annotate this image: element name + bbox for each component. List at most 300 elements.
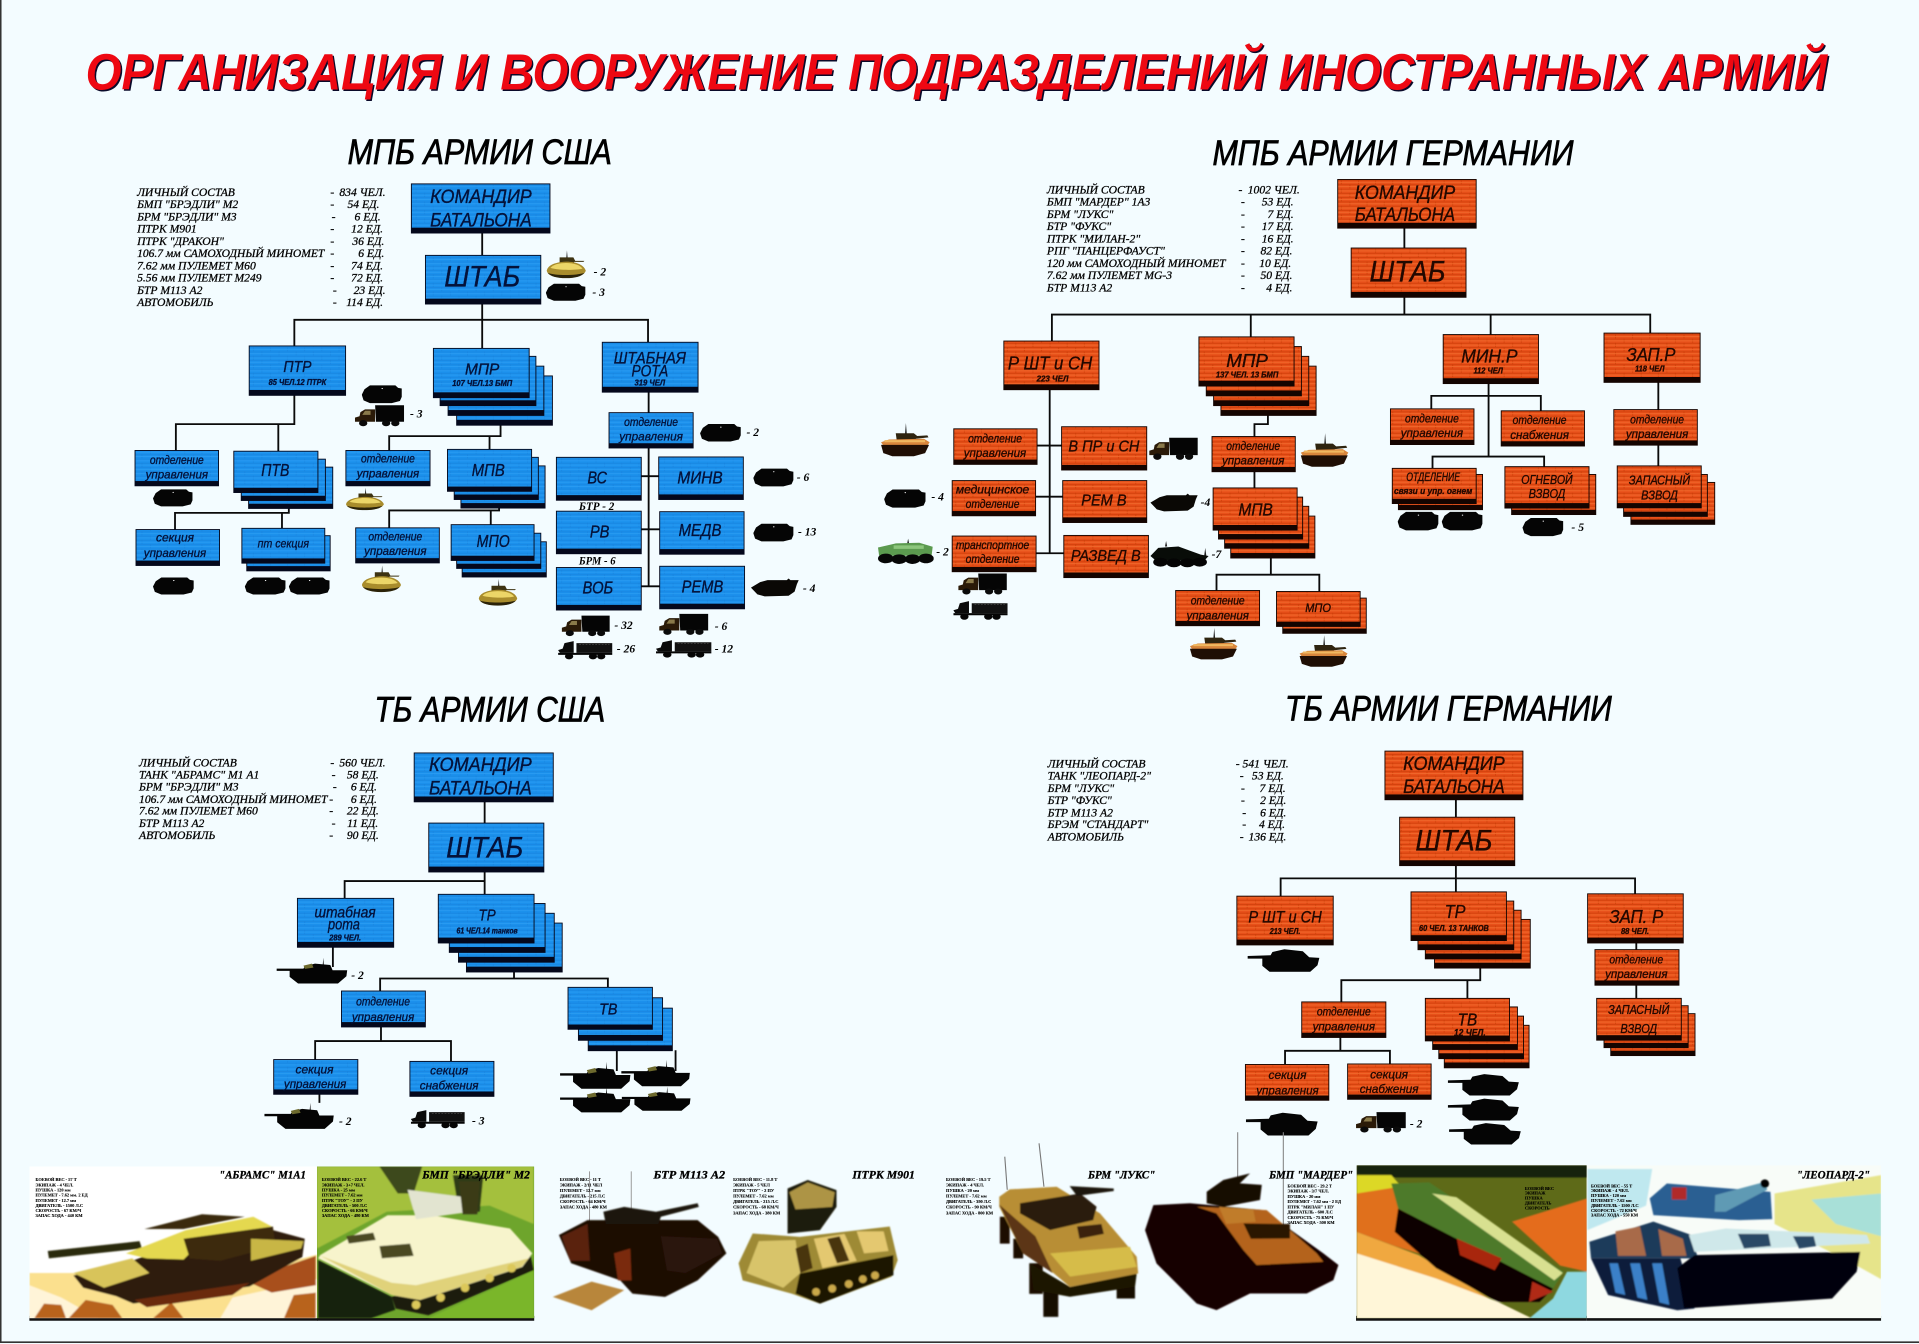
table: вооружение МПБ США: - [330, 198, 334, 211]
icon: автомобиль секции снабжения: - 3 [472, 1114, 485, 1127]
spec list: Лукс: ЭКИПАЖ - 4 ЧЕЛ. [946, 1183, 984, 1188]
label: Брэдли title: БМП "БРЭДЛИ" М2 [421, 1169, 530, 1182]
spec list: М901: ПУЛЕМЕТ - 7.62 мм [733, 1194, 774, 1199]
box: отделение управления МПР [1212, 437, 1295, 471]
box: отделение управления МПВ: отделение [1191, 594, 1245, 608]
box stack: МПВ: МПВ [1239, 499, 1273, 519]
table: вооружение МПБ Германии: 120 мм САМОХОДНЫЙ МИНОМЕТ [1047, 255, 1227, 270]
box: отделение управления штабной роты: отделение [624, 415, 678, 429]
box: ЗАП. Р: ЗАП. Р [1609, 906, 1664, 927]
spec list: Брэдли [322, 1177, 370, 1218]
box stack: ТВ: ТВ [1458, 1010, 1477, 1030]
table: вооружение ТБ Германии: - [1240, 830, 1244, 843]
box: отделение управления: управления [963, 446, 1027, 460]
table: вооружение МПБ США: 114 ЕД. [346, 296, 383, 309]
photo panel: Абрамс М1А1 [29, 1167, 318, 1321]
spec list: Абрамс: ЭКИПАЖ - 4 ЧЕЛ. [35, 1182, 73, 1187]
table: вооружение ТБ Германии: 2 ЕД. [1260, 794, 1286, 807]
box: медицинское отделение: отделение [966, 498, 1020, 511]
icons: автомобили ВОБ: - 32 [614, 619, 633, 632]
spec list: Леопард-2: СКОРОСТЬ - 72 КМ/Ч [1591, 1208, 1637, 1213]
box: ВС [557, 458, 641, 500]
icon: танк секции управления [264, 1103, 352, 1129]
icon: БРМ -7 [1150, 541, 1222, 567]
table: вооружение ТБ Германии: - [1242, 818, 1246, 831]
icon: автомобиль -2: - 2 [1410, 1117, 1423, 1130]
table: вооружение ТБ США: 6 ЕД. [351, 793, 377, 806]
spec list: Мардер: ПУШКА - 20 мм [1287, 1194, 1320, 1199]
spec list: Брэдли: БОЕВОЙ ВЕС - 22.6 Т [322, 1177, 366, 1182]
table: вооружение МПБ Германии: 82 ЕД. [1260, 245, 1292, 258]
photo panel: Мардер на склоне [1356, 1165, 1587, 1321]
box: отделение управления [342, 991, 425, 1026]
box: отделение снабжения: снабжения [1510, 428, 1569, 442]
box: Р ШТ и СН: 223 ЧЕЛ [1036, 374, 1069, 383]
icon: БРЭМ -4 [1150, 494, 1210, 511]
box: командир батальона: КОМАНДИР [429, 755, 532, 776]
box: отделение управления МПВ: управления [363, 544, 427, 558]
label: БРМ - 6: БРМ - 6 [578, 554, 616, 567]
box: транспортное отделение: отделение [966, 553, 1020, 566]
box: ЗАП. Р [1588, 894, 1683, 943]
table: вооружение МПБ Германии: - [1241, 208, 1245, 221]
box: МИН.Р: МИН.Р [1461, 345, 1518, 366]
spec list: Абрамс [35, 1177, 88, 1218]
box: Р ШТ и СН [1004, 342, 1099, 389]
spec list: Мардер: СКОРОСТЬ - 75 КМ/Ч [1287, 1215, 1334, 1220]
box: секция снабжения [1348, 1064, 1431, 1099]
box: отделение управления миномётной роты [1391, 409, 1474, 444]
box: РАЗВЕД В [1064, 536, 1148, 577]
box stack: МПО [452, 525, 546, 577]
icons: штаб vehicles: - 2 [594, 265, 606, 278]
table: вооружение ТБ США: - [332, 768, 336, 781]
table: вооружение ТБ США: 58 ЕД. [347, 768, 379, 781]
spec list: Абрамс: ЗАПАС ХОДА - 440 КМ [35, 1213, 83, 1218]
spec list: Мардер (фото): БОЕВОЙ ВЕС [1525, 1186, 1554, 1191]
box: секция управления: секция [1269, 1068, 1307, 1082]
table: вооружение МПБ США: - [330, 247, 334, 260]
box stack: ТР: 61 ЧЕЛ.14 танков [456, 926, 518, 935]
spec list: Абрамс: ДВИГАТЕЛЬ - 1500 Л.С [35, 1203, 83, 1208]
table: вооружение МПБ Германии: - [1241, 220, 1245, 233]
box: командир батальона: КОМАНДИР [1355, 182, 1455, 204]
icon: БТР -2: - 2 [747, 426, 759, 439]
table: вооружение МПБ США: 106.7 мм САМОХОДНЫЙ МИНОМЕТ [137, 245, 326, 260]
table: вооружение ТБ США: 6 ЕД. [351, 781, 377, 794]
table: вооружение МПБ США: ПТРК М901 [136, 223, 197, 236]
box: командир батальона [1338, 180, 1476, 228]
box: Р ШТ и СН: Р ШТ и СН [1008, 353, 1093, 374]
panel: ТБ армии Германии [1047, 689, 1695, 1144]
table: вооружение ТБ США: - [329, 829, 333, 842]
icons: миномёты [1398, 512, 1482, 530]
spec list: Мардер: ПТРК "МИЛАН" 1 ПУ [1287, 1204, 1335, 1209]
spec list: Лукс [946, 1177, 994, 1215]
table: вооружение МПБ США: 72 ЕД. [351, 272, 383, 285]
icon: БТР Фукс -2: - 2 [936, 546, 949, 559]
photo: БМП Мардер [1145, 1132, 1353, 1310]
table: вооружение ТБ Германии: - [1242, 806, 1246, 819]
box: штаб [1352, 248, 1466, 297]
table: вооружение МПБ США: - [333, 284, 337, 297]
spec list: Брэдли: ПУЛЕМЕТ - 7.62 мм [322, 1193, 363, 1198]
box: штабная рота: 289 ЧЕЛ. [328, 934, 361, 943]
spec list: М113: БОЕВОЙ ВЕС - 11 Т [560, 1177, 601, 1182]
icon: танк -2 [277, 958, 364, 983]
box: отделение управления [954, 429, 1037, 464]
box: ВС: ВС [587, 467, 608, 487]
table: вооружение МПБ Германии: ЛИЧНЫЙ СОСТАВ [1046, 181, 1145, 196]
box: командир батальона [412, 184, 550, 233]
spec list: М901 [733, 1177, 781, 1215]
table: вооружение МПБ США: 6 ЕД. [355, 210, 381, 223]
box stack: МПР: 107 ЧЕЛ.13 БМП [452, 379, 512, 388]
table: вооружение МПБ США: 834 ЧЕЛ. [339, 186, 386, 199]
box: отделение управления МПР: отделение [1226, 439, 1280, 453]
box: В ПР и СН [1062, 427, 1146, 470]
box: отделение управления МПР: отделение [361, 452, 415, 466]
photo: БТР М113 А2 [553, 1169, 726, 1310]
box: ПТР [250, 346, 345, 395]
box: отделение управления запасной роты [1614, 410, 1697, 445]
table: вооружение МПБ Германии: 7 ЕД. [1268, 208, 1294, 221]
spec list: Леопард-2 [1591, 1183, 1639, 1218]
table: вооружение ТБ Германии: - 541 ЧЕЛ. [1236, 757, 1289, 770]
icon: танк [1248, 949, 1319, 972]
box: отделение управления: управления [1312, 1020, 1375, 1034]
box: отделение управления запасной роты: управления [1604, 967, 1668, 981]
box: РЕМ В [1063, 481, 1146, 522]
icons: три танка [1448, 1074, 1521, 1144]
box: ЗАП.Р: ЗАП.Р [1626, 344, 1676, 365]
table: вооружение ТБ Германии: ТАНК "ЛЕОПАРД-2" [1048, 770, 1151, 783]
box stack: ПТВ [234, 452, 332, 508]
box stack: ТР [1411, 892, 1530, 968]
connector lines [315, 801, 676, 1103]
box: отделение управления штабной роты [609, 413, 693, 448]
icon: миномёт -5: - 5 [1571, 521, 1584, 534]
table: вооружение ТБ США: АВТОМОБИЛЬ [138, 829, 216, 842]
box: отделение управления МПР: управления [356, 466, 420, 480]
icons: БТР пт секции [245, 578, 330, 595]
icons: БТР и автомобиль: - 3 [410, 407, 423, 420]
spec list: Абрамс: БОЕВОЙ ВЕС - 57 Т [35, 1177, 77, 1182]
box: штабная рота: рота [327, 917, 360, 934]
box stack: огневой взвод: ОГНЕВОЙ [1521, 471, 1573, 487]
box stack: запасный взвод: ЗАПАСНЫЙ [1608, 1001, 1670, 1017]
spec list: Мардер: ПУЛЕМЕТ - 7.62 мм - 2 ЕД [1287, 1199, 1341, 1204]
spec list: М113: СКОРОСТЬ - 64 КМ/Ч [560, 1199, 606, 1204]
icons: автомобили РЕМВ [656, 614, 733, 658]
spec list: Брэдли: ЗАПАС ХОДА - 480 КМ [322, 1213, 370, 1218]
spec list: Лукс: ПУЛЕМЕТ - 7.62 мм [946, 1194, 987, 1199]
box stack: МПВ [448, 450, 545, 508]
box: МЕДВ: МЕДВ [679, 520, 721, 540]
table: вооружение ТБ США: - [329, 805, 333, 818]
box stack: ТВ [1426, 999, 1529, 1067]
table: вооружение МПБ Германии: 50 ЕД. [1260, 269, 1292, 282]
icon: БРЭМ: - 4 [803, 582, 816, 595]
box stack: МПР [1199, 337, 1316, 415]
table: вооружение МПБ Германии: - [1241, 257, 1245, 270]
box stack: МПР: МПР [465, 362, 500, 379]
box: командир батальона [415, 753, 553, 801]
panel: МПБ армии США [135, 132, 817, 659]
spec list: Лукс: ЗАПАС ХОДА - 800 КМ [946, 1210, 994, 1215]
spec list: М901: ЭКИПАЖ - 5 ЧЕЛ [733, 1183, 771, 1188]
label: Леопард-2 title: "ЛЕОПАРД-2" [1797, 1169, 1870, 1182]
box: секция снабжения: секция [430, 1064, 469, 1078]
spec list: Леопард-2: ЗАПАС ХОДА - 550 КМ [1591, 1213, 1639, 1218]
table: вооружение ТБ США: 22 ЕД. [347, 805, 379, 818]
icon: БТР МИНВ [753, 469, 809, 486]
spec list: Мардер: ДВИГАТЕЛЬ - 600 Л.С [1287, 1210, 1333, 1215]
box: отделение управления миномётной роты: управления [1400, 426, 1464, 440]
box: МЕДВ [660, 512, 744, 554]
icon: БТР под отделением [153, 489, 192, 506]
box stack: ТР: ТР [479, 907, 496, 924]
label: БТР - 2: БТР - 2 [578, 500, 615, 513]
label: ПТРК М901 title: ПТРК М901 [851, 1169, 915, 1182]
spec list: М901: ДВИГАТЕЛЬ - 215 Л.С [733, 1199, 778, 1204]
box: ЗАП. Р: 88 ЧЕЛ. [1621, 927, 1649, 936]
box: МИН.Р: 112 ЧЕЛ [1474, 366, 1503, 375]
table: вооружение ТБ США: ТАНК "АБРАМС" М1 А1 [139, 768, 259, 781]
table: вооружение МПБ США: - [330, 223, 334, 236]
box: транспортное отделение: транспортное [956, 539, 1030, 552]
table: вооружение МПБ США: БМП "БРЭДЛИ" М2 [136, 198, 238, 211]
box: отделение управления запасной роты: отделение [1630, 413, 1684, 427]
panel: МПБ армии Германии [878, 133, 1714, 667]
icon: танк секции управления: - 2 [339, 1115, 352, 1128]
table: вооружение ТБ Германии: 53 ЕД. [1252, 770, 1284, 783]
table: вооружение ТБ Германии: ЛИЧНЫЙ СОСТАВ [1047, 755, 1145, 770]
table: вооружение МПБ США: БРМ "БРЭДЛИ" М3 [136, 210, 237, 223]
box: РЕМВ [660, 567, 744, 608]
spec list: Мардер: ЭКИПАЖ - 3/7 ЧЕЛ. [1287, 1189, 1329, 1194]
box: отделение управления МПВ [1176, 591, 1259, 625]
icon: танк секции управления [1246, 1113, 1318, 1136]
box stack: запасный взвод [1597, 999, 1695, 1055]
spec list: Лукс: БОЕВОЙ ВЕС - 19.5 Т [946, 1177, 991, 1182]
icons: автомобили ВОБ: - 26 [617, 642, 635, 655]
box: медицинское отделение [953, 481, 1035, 515]
label: Абрамс title: "АБРАМС" М1А1 [219, 1169, 306, 1182]
box: РАЗВЕД В: РАЗВЕД В [1071, 548, 1141, 565]
box: секция снабжения: секция [1370, 1067, 1409, 1081]
table: вооружение МПБ Германии: 1002 ЧЕЛ. [1248, 183, 1300, 196]
box: командир батальона [1385, 752, 1522, 799]
box stack: ТВ: 12 ЧЕЛ. [1454, 1028, 1486, 1039]
box stack: пт секция [242, 529, 330, 570]
table: вооружение МПБ Германии: 4 ЕД. [1266, 281, 1292, 294]
box: отделение управления: отделение [356, 995, 410, 1009]
spec list: М113: ПУЛЕМЕТ - 12.7 мм [560, 1188, 601, 1193]
box: В ПР и СН: В ПР и СН [1068, 439, 1140, 456]
icons: четыре танка [560, 1060, 690, 1112]
spec list: Абрамс: ПУЛЕМЕТ - 12.7 мм [35, 1198, 76, 1203]
box: штаб: ШТАБ [444, 260, 520, 293]
table: вооружение МПБ Германии: - [1239, 183, 1243, 196]
icons: автомобили транспортного отделения [953, 574, 1008, 620]
icon: БМП МПО [479, 579, 517, 606]
icons: БТР и автомобиль [355, 385, 423, 426]
box: секция управления: управления [143, 546, 207, 560]
table: вооружение ТБ США: - [329, 793, 333, 806]
box stack: запасный взвод: ВЗВОД [1620, 1021, 1657, 1036]
box: штабная рота: 319 ЧЕЛ [635, 379, 666, 388]
icon: БТР -2 [700, 424, 759, 442]
table: вооружение ТБ Германии: БТР "ФУКС" [1047, 794, 1112, 807]
box: секция управления: управления [283, 1077, 347, 1091]
table: вооружение ТБ Германии: БРМ "ЛУКС" [1047, 782, 1114, 795]
spec list: Лукс: ПУШКА - 20 мм [946, 1188, 979, 1193]
box stack: ПТВ: ПТВ [261, 460, 289, 480]
box stack: МПВ: МПВ [472, 460, 505, 480]
table: вооружение МПБ США: 5.56 мм ПУЛЕМЕТ М249 [137, 272, 262, 285]
spec list: Леопард-2: БОЕВОЙ ВЕС - 55 Т [1591, 1183, 1632, 1188]
box: отделение управления запасной роты: управления [1625, 427, 1689, 441]
connector lines [175, 233, 660, 586]
connector lines [1281, 799, 1636, 1065]
table: вооружение МПБ США: - [330, 272, 334, 285]
icon: БМП [346, 488, 384, 510]
box: отделение управления ПТР: отделение [150, 453, 204, 467]
box: Р ШТ и СН: 213 ЧЕЛ. [1269, 927, 1300, 936]
table: вооружение ТБ США: 106.7 мм САМОХОДНЫЙ МИНОМЕТ [139, 791, 329, 806]
table: вооружение МПБ Германии: - [1241, 269, 1245, 282]
box: штабная рота [603, 343, 698, 392]
box: отделение снабжения [1502, 411, 1584, 446]
icons: штаб vehicles [546, 250, 606, 301]
table: вооружение МПБ США: - [330, 259, 334, 272]
box stack: запасный взвод [1618, 466, 1714, 524]
spec list: Брэдли: ЭКИПАЖ - 3+7 ЧЕЛ. [322, 1182, 364, 1187]
box: секция управления [1246, 1065, 1328, 1100]
table: вооружение ТБ США: БРМ "БРЭДЛИ" М3 [138, 781, 239, 794]
box: РЕМВ: РЕМВ [682, 576, 723, 596]
spec list: Брэдли: СКОРОСТЬ - 66 КМ/Ч [322, 1208, 368, 1213]
spec list: Мардер (фото): СКОРОСТЬ [1525, 1205, 1550, 1210]
icon: автомобиль [1149, 438, 1198, 460]
box: штаб [1400, 818, 1514, 865]
icon: автомобиль -2 [1356, 1112, 1423, 1133]
icon: БТР МЕДВ [753, 524, 817, 541]
box: медицинское отделение: медицинское [956, 483, 1030, 496]
table: вооружение ТБ Германии [1047, 755, 1289, 843]
box: отделение управления: отделение [1317, 1004, 1371, 1018]
table: вооружение МПБ США: 7.62 мм ПУЛЕМЕТ М60 [137, 259, 256, 272]
icon: БРЭМ [751, 578, 816, 596]
box stack: отделение связи и управления огнем [1393, 469, 1482, 509]
spec list: М113: ЗАПАС ХОДА - 480 КМ [560, 1205, 608, 1210]
heading: МПБ армии США: МПБ АРМИИ США [348, 132, 612, 172]
box: отделение управления: отделение [968, 431, 1022, 445]
box stack: отделение связи и управления огнем: ОТДЕЛЕНИЕ [1406, 471, 1460, 484]
photo panel: БМП Брэдли М2 [317, 1167, 534, 1321]
icon: автомобиль секции снабжения [411, 1110, 485, 1128]
table: вооружение ТБ США: 7.62 мм ПУЛЕМЕТ М60 [139, 805, 258, 818]
box: ВОБ: ВОБ [583, 578, 613, 598]
spec list: М901: ПТРК "ТОУ" - 2 ПУ [733, 1188, 775, 1193]
table: вооружение ТБ Германии: БРЭМ "СТАНДАРТ" [1047, 818, 1149, 831]
table: вооружение МПБ США: 6 ЕД. [358, 247, 384, 260]
table: вооружение ТБ США: - [330, 757, 334, 770]
box stack: пт секция: пт секция [258, 537, 309, 551]
box: РВ: РВ [590, 521, 609, 541]
box: штабная рота: штабная [315, 904, 376, 921]
box: отделение управления МПР: управления [1221, 454, 1285, 468]
spec list: Мардер: БОЕВОЙ ВЕС - 29.2 Т [1287, 1183, 1332, 1188]
box: отделение управления ПТР [135, 451, 218, 485]
heading: ТБ армии Германии: ТБ АРМИИ ГЕРМАНИИ [1285, 689, 1612, 729]
box: штаб: ШТАБ [1415, 825, 1492, 858]
box: Р ШТ и СН: Р ШТ и СН [1248, 907, 1322, 926]
table: вооружение ТБ США: 90 ЕД. [347, 829, 379, 842]
table: вооружение ТБ Германии: АВТОМОБИЛЬ [1047, 830, 1124, 843]
box stack: МПР: 137 ЧЕЛ. 13 БМП [1216, 371, 1279, 380]
table: вооружение ТБ Германии: 7 ЕД. [1260, 782, 1286, 795]
icon: БМП Мардер [1301, 433, 1348, 467]
box: штаб [426, 256, 540, 304]
box: отделение управления: управления [351, 1010, 415, 1024]
box: отделение управления МПВ: отделение [368, 529, 422, 543]
box: ПТР: ПТР [283, 359, 312, 376]
box: секция управления: управления [1255, 1083, 1319, 1097]
spec list: Леопард-2: ПУЛЕМЕТ - 7.62 мм [1591, 1198, 1632, 1203]
box: секция управления: секция [296, 1062, 334, 1076]
table: вооружение ТБ Германии: - [1241, 782, 1245, 795]
box: РВ [557, 512, 641, 553]
icons: штаб vehicles: - 3 [592, 286, 605, 299]
icon: БТР Фукс -2 [878, 539, 949, 564]
heading: ТБ армии США: ТБ АРМИИ США [374, 689, 605, 729]
box: командир батальона: КОМАНДИР [1403, 754, 1505, 775]
box: отделение управления МПВ: управления [1186, 608, 1249, 622]
spec list: М901: ЗАПАС ХОДА - 380 КМ [733, 1210, 781, 1215]
table: вооружение МПБ США: 74 ЕД. [351, 259, 383, 272]
table: вооружение МПБ США: ЛИЧНЫЙ СОСТАВ [136, 184, 235, 199]
table: вооружение МПБ Германии: БРМ "ЛУКС" [1046, 208, 1114, 221]
table: вооружение ТБ США: БТР М113 А2 [138, 817, 205, 830]
spec list: Брэдли: ДВИГАТЕЛЬ - 500 Л.С [322, 1203, 367, 1208]
table: вооружение МПБ США: 23 ЕД. [354, 284, 386, 297]
box: штабная рота: ШТАБНАЯ [614, 349, 687, 368]
table: вооружение МПБ США: 12 ЕД. [351, 223, 383, 236]
spec list: Абрамс: ПУЛЕМЕТ - 7.62 мм. 2 ЕД [35, 1193, 88, 1198]
icons: автомобили ВОБ [558, 616, 635, 659]
box: РЕМ В: РЕМ В [1081, 493, 1127, 510]
box: командир батальона: БАТАЛЬОНА [429, 778, 532, 799]
box: транспортное отделение [953, 536, 1036, 571]
photo: ПТРК М901 [733, 1169, 915, 1304]
box stack: ТВ: ТВ [599, 1002, 618, 1019]
spec list: М113: ЭКИПАЖ - 2/11 ЧЕЛ [560, 1183, 603, 1188]
spec list: Леопард-2: ПУШКА - 120 мм [1591, 1193, 1626, 1198]
box stack: ТР: 60 ЧЕЛ. 13 ТАНКОВ [1419, 924, 1489, 933]
box stack: МПО [1277, 592, 1366, 633]
icon: БТР МИНВ: - 6 [797, 471, 809, 484]
icon: БТР -4 [884, 489, 944, 508]
box: секция снабжения: снабжения [420, 1078, 479, 1092]
photo panel: Леопард-2 [1587, 1165, 1881, 1321]
table: вооружение ТБ США: - [332, 817, 336, 830]
icon: БТР -4: - 4 [931, 491, 944, 504]
table: вооружение МПБ США: - [330, 235, 334, 248]
box stack: МПР [434, 349, 552, 425]
box: отделение управления ПТР: управления [145, 468, 208, 482]
